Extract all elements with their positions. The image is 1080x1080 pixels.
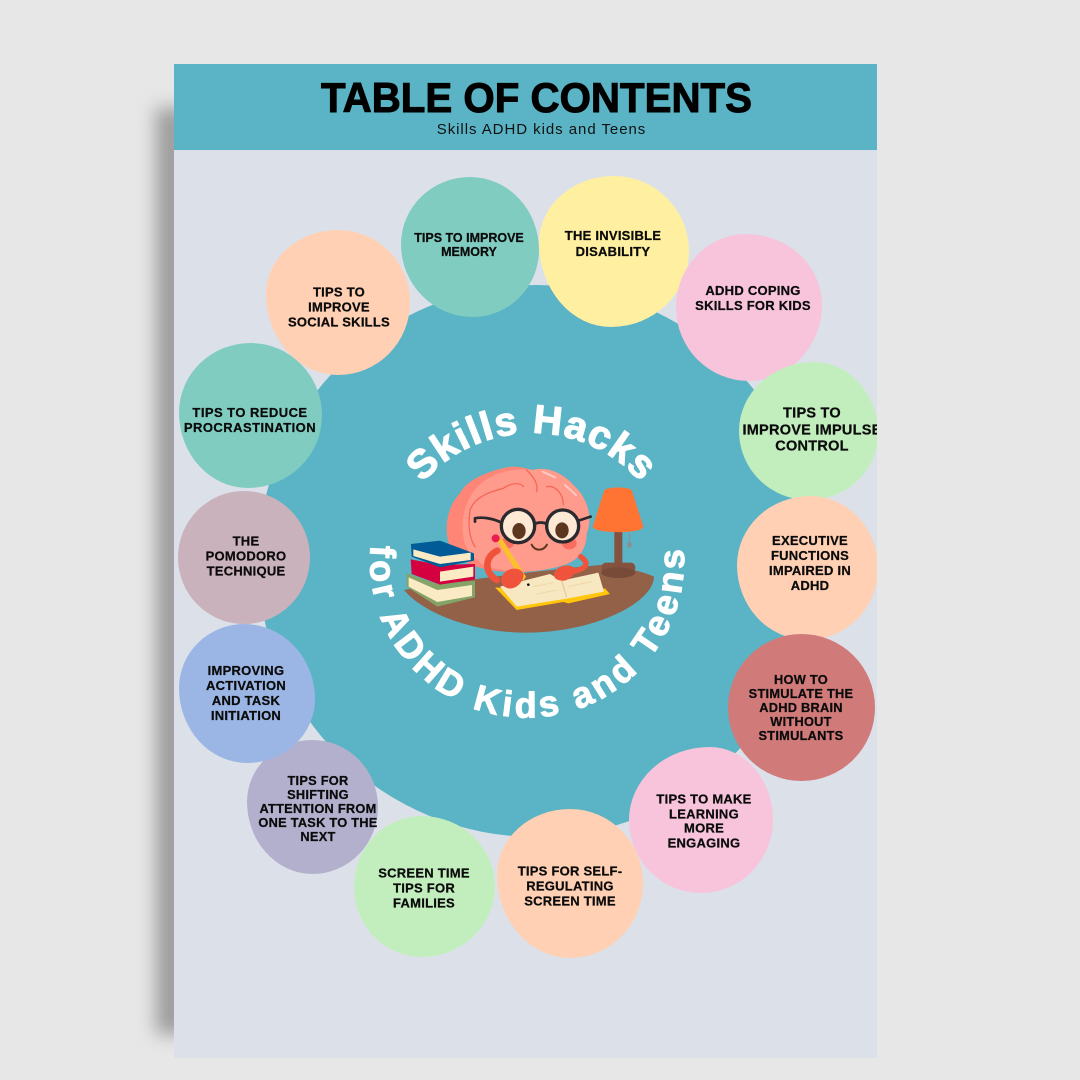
blob: improving activation and task initiation: INITIATION <box>211 708 281 723</box>
blob: tips to make learning more engaging <box>629 747 773 893</box>
title: TABLE OF CONTENTS <box>321 74 752 121</box>
blob: tips for shifting attention: ATTENTION FROM <box>259 801 376 816</box>
blob: tips for shifting attention: ONE TASK TO THE <box>258 815 378 830</box>
blob: tips to reduce procrastination: PROCRASTINATION <box>184 420 316 435</box>
blob: how to stimulate the ADHD brain without stimulants: HOW TO <box>774 672 828 687</box>
blob: the pomodoro technique: THE <box>233 534 259 548</box>
blob: tips for self-regulating screen time: SCREEN TIME <box>524 894 616 908</box>
blob: tips to improve memory <box>401 177 539 317</box>
blob: executive functions impaired in ADHD: FUNCTIONS <box>771 548 849 563</box>
blob: how to stimulate the ADHD brain without stimulants: WITHOUT <box>770 714 832 729</box>
blob: tips to make learning more engaging: ENGAGING <box>668 836 740 851</box>
poster drop shadow <box>156 108 188 1034</box>
blob: how to stimulate the ADHD brain without stimulants <box>728 634 875 781</box>
blob: tips for shifting attention: NEXT <box>300 829 336 844</box>
brain <box>447 467 591 572</box>
blob: improving activation and task initiation <box>179 624 315 763</box>
pencil and arms <box>487 534 586 589</box>
blob: tips to improve impulse control: CONTROL <box>775 438 849 454</box>
stack of books <box>407 541 475 607</box>
blob: screen time tips for families: SCREEN TIME <box>378 866 470 880</box>
blob: tips to reduce procrastination: TIPS TO REDUCE <box>192 405 308 420</box>
blob: how to stimulate the ADHD brain without stimulants: ADHD BRAIN <box>759 700 843 715</box>
blob: tips to improve social skills: SOCIAL SKILLS <box>288 314 390 330</box>
blob: how to stimulate the ADHD brain without stimulants: STIMULANTS <box>759 728 843 743</box>
blob: the invisible disability <box>539 176 689 327</box>
lamp <box>593 487 643 578</box>
blob: tips to reduce procrastination <box>179 343 322 488</box>
blob: the pomodoro technique <box>178 491 310 624</box>
illustration: brain at desk <box>404 467 654 633</box>
blob: tips to improve memory: TIPS TO IMPROVE <box>414 231 524 245</box>
blob: executive functions impaired in ADHD <box>737 496 878 640</box>
blob: screen time tips for families <box>354 816 495 957</box>
blob: executive functions impaired in ADHD: IMPAIRED IN <box>769 563 851 578</box>
blob: tips for self-regulating screen time: TIPS FOR SELF- <box>518 864 622 878</box>
open book <box>495 573 610 610</box>
blob: tips for shifting attention <box>247 740 378 874</box>
blob: tips for shifting attention: TIPS FOR <box>287 773 349 788</box>
blob: improving activation and task initiation: AND TASK <box>212 693 280 708</box>
desk <box>404 565 654 633</box>
poster <box>174 64 877 1058</box>
header band <box>174 64 877 150</box>
blob: how to stimulate the ADHD brain without stimulants: STIMULATE THE <box>749 686 853 701</box>
curved heading: for ADHD Kids and Teens: for ADHD Kids and Teens <box>370 546 685 718</box>
blob: the pomodoro technique: TECHNIQUE <box>207 564 285 578</box>
blob: executive functions impaired in ADHD: EXECUTIVE <box>772 533 848 548</box>
blob: tips for self-regulating screen time: REGULATING <box>526 878 614 894</box>
blob: ADHD coping skills for kids <box>676 234 822 381</box>
blob: tips to improve memory: MEMORY <box>441 245 497 259</box>
blob: improving activation and task initiation: ACTIVATION <box>206 678 286 693</box>
blob: tips to make learning more engaging: LEARNING <box>669 806 739 821</box>
central teal circle <box>258 285 814 837</box>
blob: screen time tips for families: TIPS FOR <box>393 880 455 896</box>
blob: tips to make learning more engaging: MORE <box>684 821 724 836</box>
blob: tips to improve social skills: IMPROVE <box>308 300 370 314</box>
blob: the invisible disability: THE INVISIBLE <box>565 228 661 243</box>
blob: tips to improve social skills: TIPS TO <box>313 284 365 300</box>
blob: tips to improve social skills <box>266 230 410 375</box>
blob: ADHD coping skills for kids: SKILLS FOR KIDS <box>695 298 811 313</box>
blob: tips to make learning more engaging: TIPS TO MAKE <box>656 792 752 807</box>
blob: tips to improve impulse control <box>739 362 878 500</box>
subtitle: Skills ADHD kids and Teens <box>437 121 646 138</box>
blob: screen time tips for families: FAMILIES <box>393 896 455 910</box>
blob: tips for shifting attention: SHIFTING <box>287 787 349 802</box>
blob: tips to improve impulse control: TIPS TO <box>783 405 841 421</box>
blob: the invisible disability: DISABILITY <box>576 244 650 259</box>
blob: the pomodoro technique: POMODORO <box>206 548 286 564</box>
curved heading: Skills Hacks: Skills Hacks <box>407 404 652 479</box>
blob: tips for self-regulating screen time <box>497 809 643 958</box>
blob: executive functions impaired in ADHD: ADHD <box>791 578 829 593</box>
blob: improving activation and task initiation: IMPROVING <box>208 663 284 678</box>
blob: ADHD coping skills for kids: ADHD COPING <box>705 283 801 298</box>
